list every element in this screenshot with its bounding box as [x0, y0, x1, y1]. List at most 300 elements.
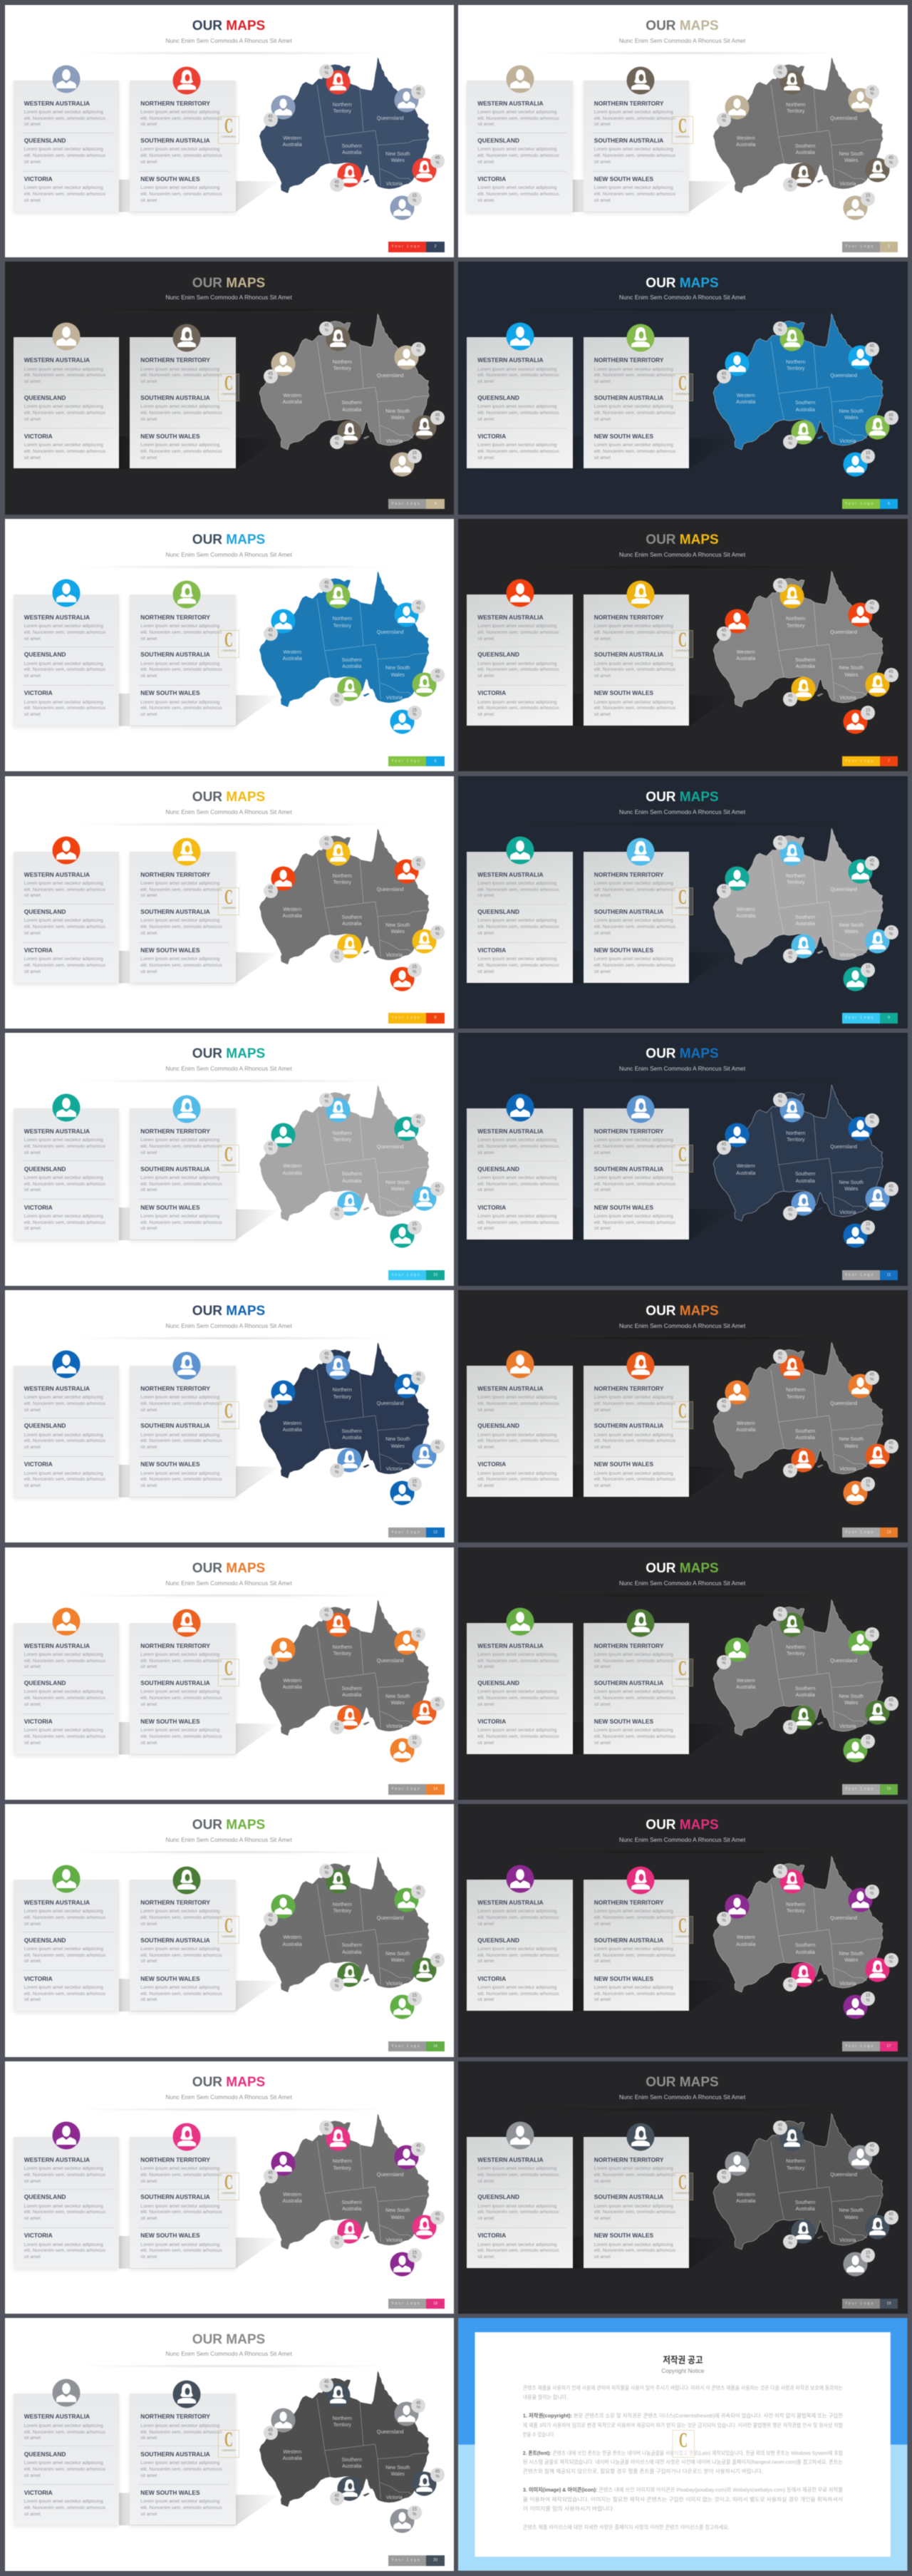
- map labels: Western: [737, 907, 755, 912]
- watermark logo: CONTENTS: [222, 907, 236, 910]
- pin: Southern Australia: %: [335, 1727, 338, 1731]
- item: New South Wales: [594, 1204, 675, 1232]
- map labels: Queensland: [830, 2173, 857, 2178]
- pin: Northern Territory: [773, 1093, 804, 1123]
- card: left: [13, 1622, 119, 1753]
- item: Queensland: Lorem ipsum amet sectetur adipiscing: [24, 1947, 103, 1952]
- pin: Queensland: %: [417, 1892, 420, 1896]
- map labels: Territory: [333, 2166, 351, 2171]
- pin: New South Wales: [412, 1439, 445, 1468]
- item: Queensland: elit. Nuncenim sem, ommodo arhoncus: [477, 1696, 559, 1701]
- item: Queensland: sit amet: [477, 417, 494, 422]
- map labels: Queensland: [377, 887, 404, 892]
- watermark logo: [673, 2428, 694, 2458]
- item: Victoria: Lorem ipsum amet sectetur adipiscing: [24, 1985, 103, 1990]
- map labels: Southern: [795, 915, 815, 920]
- map labels: Queensland: [377, 1659, 404, 1664]
- item: New South Wales: Lorem ipsum amet sectetur adipiscing: [140, 1471, 219, 1476]
- footer logo and page number: [842, 1784, 898, 1795]
- footer logo and page number: Your Logo: [391, 244, 421, 249]
- map labels: Victoria: [386, 2495, 403, 2500]
- item: Southern Australia: [140, 908, 222, 937]
- map labels: [256, 825, 432, 967]
- item: Southern Australia: [594, 908, 675, 937]
- item: New South Wales: elit. Nuncenim sem, ommodo arhoncus: [594, 1477, 675, 1482]
- icon: male avatar: [506, 2121, 534, 2150]
- map labels: Queensland: [377, 1916, 404, 1921]
- map labels: Territory: [333, 109, 351, 114]
- card: left: [13, 1108, 119, 1240]
- item: Southern Australia: [140, 651, 222, 680]
- icon: female avatar: [626, 324, 654, 352]
- item: Victoria: elit. Nuncenim sem, ommodo arhoncus: [24, 1220, 105, 1225]
- notice title: 저작권 공고: [663, 2355, 703, 2366]
- item: Western Australia: Lorem ipsum amet sectetur adipiscing: [477, 1395, 556, 1400]
- map labels: [710, 1340, 885, 1480]
- icon: male avatar: [506, 836, 534, 865]
- map labels: Northern: [786, 1902, 805, 1907]
- pin: Northern Territory: [773, 1864, 804, 1894]
- item: Victoria: elit. Nuncenim sem, ommodo arhoncus: [477, 1992, 559, 1997]
- pin: Queensland: 45: [416, 88, 421, 92]
- pin: Northern Territory: 45: [777, 66, 782, 71]
- item: Southern Australia: Lorem ipsum amet sectetur adipiscing: [594, 1689, 673, 1694]
- item: Southern Australia: sit amet: [594, 674, 611, 679]
- item: Southern Australia: elit. Nuncenim sem, ommodo arhoncus: [140, 924, 222, 929]
- pin: Northern Territory: %: [325, 2385, 328, 2389]
- item: Victoria: elit. Nuncenim sem, ommodo arhoncus: [477, 2248, 559, 2253]
- pin: Northern Territory: 45: [777, 2123, 782, 2128]
- footer logo and page number: [842, 1270, 898, 1280]
- item: Northern Territory: [140, 1642, 222, 1671]
- pin: Southern Australia: [783, 1705, 816, 1734]
- pin: Western Australia: 45: [268, 1657, 273, 1661]
- item: New South Wales: Lorem ipsum amet sectetur adipiscing: [594, 1214, 673, 1219]
- footer logo and page number: Your Logo: [845, 502, 874, 506]
- icon: female avatar: [172, 324, 201, 352]
- pin: Queensland: %: [870, 349, 874, 354]
- pin: Northern Territory: 45: [324, 2380, 329, 2384]
- item: New South Wales: NEW SOUTH WALES: [594, 1975, 653, 1982]
- pin: Southern Australia: %: [789, 699, 792, 704]
- pin: Northern Territory: 45: [777, 324, 782, 328]
- map labels: Territory: [787, 1909, 804, 1914]
- item: Northern Territory: sit amet: [594, 122, 611, 127]
- item: Victoria: elit. Nuncenim sem, ommodo arhoncus: [24, 1477, 105, 1482]
- pin: Southern Australia: [329, 163, 362, 192]
- item: Queensland: sit amet: [24, 1445, 41, 1450]
- item: Northern Territory: elit. Nuncenim sem, ommodo arhoncus: [140, 2430, 222, 2435]
- pin: Western Australia: [717, 609, 750, 641]
- pin: Western Australia: [264, 94, 296, 128]
- item: Western Australia: [24, 356, 105, 384]
- notice intro: [523, 2385, 843, 2401]
- subtitle: Nunc Enim Sem Commodo A Rhoncus Sit Amet: [165, 2093, 292, 2101]
- pin: Victoria: 15: [412, 1222, 417, 1227]
- pin: Southern Australia: 45: [334, 2494, 339, 2498]
- pin: Northern Territory: [319, 578, 351, 609]
- pin: Victoria: 15: [866, 2251, 871, 2255]
- pin: Southern Australia: 45: [788, 180, 793, 185]
- pin: Queensland: %: [870, 2149, 874, 2153]
- map: Australia: [256, 311, 432, 452]
- item: Victoria: sit amet: [477, 198, 494, 203]
- watermark logo: CONTENTS: [222, 393, 236, 396]
- pin: Queensland: 45: [869, 88, 874, 92]
- item: Northern Territory: NORTHERN TERRITORY: [140, 1128, 210, 1135]
- pin: Southern Australia: 45: [334, 952, 339, 956]
- item: Queensland: [477, 1422, 559, 1451]
- item: Victoria: VICTORIA: [477, 947, 506, 954]
- pin: Southern Australia: 45: [788, 437, 793, 441]
- item: Western Australia: WESTERN AUSTRALIA: [477, 356, 544, 364]
- pin: Queensland: 45: [869, 1630, 874, 1634]
- map: Australia: [256, 569, 432, 709]
- item: Southern Australia: SOUTHERN AUSTRALIA: [594, 1937, 663, 1944]
- map labels: Wales: [391, 416, 405, 421]
- pin: Northern Territory: %: [325, 843, 328, 847]
- footer logo and page number: [842, 2299, 898, 2309]
- item: New South Wales: sit amet: [140, 1997, 157, 2002]
- pin: New South Wales: %: [435, 1446, 440, 1451]
- item: Western Australia: [24, 614, 105, 642]
- pin: Western Australia: %: [269, 634, 272, 638]
- icon: female avatar: [626, 1095, 654, 1123]
- card: left: [467, 1622, 573, 1753]
- item: Victoria: VICTORIA: [477, 689, 506, 696]
- icon: female avatar: [172, 66, 201, 96]
- pin: Western Australia: %: [722, 376, 726, 381]
- item: Queensland: QUEENSLAND: [24, 1679, 66, 1686]
- pin: Northern Territory: 45: [777, 1095, 782, 1099]
- pin: Southern Australia: 45: [788, 1208, 793, 1212]
- subtitle: Nunc Enim Sem Commodo A Rhoncus Sit Amet: [619, 808, 745, 815]
- map: Australia: [256, 2369, 432, 2508]
- map labels: Territory: [787, 1652, 804, 1657]
- item: Victoria: sit amet: [24, 969, 41, 974]
- item: Queensland: elit. Nuncenim sem, ommodo arhoncus: [24, 1953, 105, 1958]
- item: Northern Territory: Lorem ipsum amet sectetur adipiscing: [594, 110, 673, 115]
- map labels: Western: [283, 650, 301, 655]
- item: Southern Australia: elit. Nuncenim sem, ommodo arhoncus: [140, 2467, 222, 2472]
- pin: Western Australia: [264, 1123, 296, 1155]
- item: New South Wales: [594, 1460, 675, 1490]
- item: Southern Australia: sit amet: [140, 2216, 157, 2221]
- watermark logo: CONTENTS: [675, 1935, 689, 1938]
- subtitle: Nunc Enim Sem Commodo A Rhoncus Sit Amet: [619, 294, 745, 301]
- pin: Queensland: [848, 1885, 879, 1912]
- pin: Western Australia: %: [269, 119, 272, 123]
- item: Western Australia: sit amet: [477, 893, 494, 898]
- item: Victoria: [477, 1460, 559, 1490]
- panel: slide navy teal: [458, 776, 908, 1029]
- item: Southern Australia: SOUTHERN AUSTRALIA: [140, 1937, 210, 1944]
- map labels: Wales: [391, 929, 405, 934]
- map labels: Victoria: [386, 182, 403, 187]
- map labels: Queensland: [377, 630, 404, 635]
- map labels: Territory: [787, 880, 804, 885]
- pin: Queensland: %: [870, 92, 874, 96]
- pin: Victoria: %: [413, 456, 416, 460]
- map labels: Victoria: [839, 1467, 856, 1472]
- map labels: [710, 825, 885, 967]
- map: Australia: [710, 826, 886, 966]
- card: right: [583, 1108, 689, 1240]
- item: Queensland: elit. Nuncenim sem, ommodo arhoncus: [24, 667, 105, 672]
- map labels: Northern: [786, 874, 805, 879]
- pin: Southern Australia: [782, 163, 816, 192]
- footer logo and page number: 12: [433, 1530, 437, 1535]
- pin: Victoria: [390, 2505, 422, 2533]
- item: Queensland: [24, 2451, 105, 2480]
- pin: New South Wales: 45: [888, 2212, 893, 2217]
- map labels: Australia: [736, 2199, 755, 2204]
- pin: Victoria: %: [866, 199, 870, 203]
- watermark logo: [671, 1401, 693, 1429]
- pin: Western Australia: %: [722, 890, 726, 895]
- icon: male avatar: [52, 322, 81, 351]
- item: Victoria: VICTORIA: [24, 175, 53, 182]
- item: Southern Australia: Lorem ipsum amet sectetur adipiscing: [140, 1433, 219, 1438]
- pin: Southern Australia: [330, 1191, 362, 1220]
- item: Victoria: [477, 175, 559, 203]
- item: Southern Australia: elit. Nuncenim sem, ommodo arhoncus: [140, 1953, 222, 1958]
- map labels: Queensland: [830, 1401, 857, 1406]
- item: Victoria: Lorem ipsum amet sectetur adipiscing: [477, 1985, 556, 1990]
- panel: slide navy dark blue: [458, 1033, 908, 1286]
- map labels: Territory: [787, 2166, 804, 2171]
- watermark logo: [671, 887, 693, 915]
- map labels: Wales: [391, 158, 405, 163]
- item: Victoria: Lorem ipsum amet sectetur adipiscing: [477, 700, 556, 705]
- item: Western Australia: WESTERN AUSTRALIA: [24, 871, 90, 878]
- item: Victoria: VICTORIA: [24, 689, 53, 696]
- item: New South Wales: elit. Nuncenim sem, ommodo arhoncus: [140, 706, 222, 711]
- item: Queensland: elit. Nuncenim sem, ommodo arhoncus: [477, 2210, 559, 2215]
- title: OUR MAPS: [646, 1561, 719, 1576]
- footer logo and page number: 10: [433, 1273, 437, 1277]
- map labels: Wales: [391, 1444, 405, 1449]
- map: Australia: [256, 2111, 432, 2252]
- pin: Queensland: 45: [416, 1630, 421, 1634]
- card: left: [467, 1880, 573, 2011]
- item: New South Wales: NEW SOUTH WALES: [594, 1460, 653, 1468]
- item: Western Australia: sit amet: [24, 379, 41, 384]
- pin: Western Australia: %: [269, 376, 272, 381]
- item: Queensland: sit amet: [24, 417, 41, 422]
- item: Western Australia: [477, 356, 559, 386]
- footer logo and page number: Your Logo: [845, 244, 874, 249]
- item: New South Wales: sit amet: [594, 198, 611, 203]
- item: Southern Australia: [594, 394, 675, 423]
- pin: New South Wales: 45: [435, 2470, 440, 2474]
- item: Northern Territory: Lorem ipsum amet sectetur adipiscing: [594, 1652, 673, 1657]
- item: Southern Australia: sit amet: [140, 1959, 157, 1964]
- pin: Western Australia: 45: [722, 1657, 726, 1661]
- map labels: Western: [737, 393, 755, 398]
- panel: slide blue: [4, 519, 454, 771]
- map labels: Australia: [342, 150, 361, 155]
- map labels: Southern: [795, 2200, 815, 2205]
- item: Southern Australia: SOUTHERN AUSTRALIA: [140, 1165, 210, 1173]
- map labels: Victoria: [386, 1467, 403, 1472]
- panel: slide dark yellow: [458, 519, 908, 771]
- icon: male avatar: [506, 1350, 534, 1379]
- item: Northern Territory: elit. Nuncenim sem, ommodo arhoncus: [140, 1144, 222, 1149]
- item: Queensland: sit amet: [477, 1702, 494, 1707]
- pin: Victoria: [390, 1734, 422, 1762]
- pin: Western Australia: [717, 1894, 750, 1926]
- map labels: Australia: [796, 922, 815, 927]
- pin: Queensland: %: [417, 863, 420, 867]
- item: Victoria: sit amet: [24, 2255, 41, 2260]
- item: Southern Australia: Lorem ipsum amet sectetur adipiscing: [140, 1175, 219, 1180]
- map labels: Australia: [796, 1693, 815, 1698]
- map labels: Territory: [787, 1138, 804, 1143]
- item: Southern Australia: sit amet: [594, 160, 611, 165]
- item: Victoria: VICTORIA: [477, 1460, 506, 1468]
- card: right: [130, 1880, 235, 2011]
- item: Northern Territory: [140, 2156, 222, 2185]
- map labels: Western: [283, 1164, 301, 1169]
- pin: Southern Australia: %: [335, 2498, 338, 2503]
- pin: Western Australia: [264, 351, 296, 383]
- item: Queensland: sit amet: [24, 1187, 41, 1192]
- item: Western Australia: WESTERN AUSTRALIA: [477, 614, 544, 621]
- map labels: Territory: [333, 1652, 351, 1657]
- item: Western Australia: Lorem ipsum amet sectetur adipiscing: [477, 1909, 556, 1914]
- item: Queensland: [477, 394, 559, 423]
- footer logo and page number: 16: [433, 2044, 437, 2049]
- map labels: Southern: [341, 915, 362, 920]
- title: OUR MAPS: [192, 1561, 265, 1576]
- watermark logo: CONTENTS: [675, 2192, 689, 2195]
- map labels: Northern: [333, 2416, 352, 2421]
- pin: Southern Australia: [330, 676, 362, 706]
- pin: Southern Australia: [783, 2219, 816, 2249]
- subtitle: Nunc Enim Sem Commodo A Rhoncus Sit Amet: [165, 1065, 292, 1072]
- pin: New South Wales: [865, 411, 898, 440]
- card: right: [583, 851, 689, 982]
- map labels: Australia: [796, 1950, 815, 1955]
- item: Southern Australia: sit amet: [140, 931, 157, 936]
- footer logo and page number: Your Logo: [391, 1530, 421, 1535]
- item: Northern Territory: NORTHERN TERRITORY: [140, 1899, 210, 1906]
- watermark logo: CONTENTS: [675, 393, 689, 396]
- pin: Queensland: 45: [416, 1887, 421, 1891]
- item: Southern Australia: elit. Nuncenim sem, ommodo arhoncus: [594, 153, 675, 158]
- item: Western Australia: sit amet: [477, 1922, 494, 1927]
- pin: Queensland: %: [870, 1892, 874, 1896]
- pin: Victoria: %: [866, 1227, 870, 1232]
- pin: Northern Territory: 45: [324, 1352, 329, 1356]
- footer logo and page number: [388, 2041, 445, 2051]
- item: Western Australia: elit. Nuncenim sem, ommodo arhoncus: [24, 630, 105, 635]
- panel: slide yellow: [4, 776, 454, 1029]
- item: Southern Australia: sit amet: [594, 1187, 611, 1192]
- pin: New South Wales: [412, 1182, 445, 1211]
- item: Northern Territory: sit amet: [140, 1150, 157, 1155]
- item: New South Wales: Lorem ipsum amet sectetur adipiscing: [140, 957, 219, 962]
- footer logo and page number: [842, 756, 898, 766]
- pin: New South Wales: 45: [435, 1699, 440, 1703]
- item: Western Australia: WESTERN AUSTRALIA: [477, 1128, 544, 1135]
- map labels: Wales: [391, 1958, 405, 1963]
- map labels: Victoria: [839, 439, 856, 444]
- map labels: Australia: [283, 1685, 302, 1690]
- item: Queensland: QUEENSLAND: [24, 1937, 66, 1944]
- item: Queensland: Lorem ipsum amet sectetur adipiscing: [24, 1689, 103, 1694]
- item: Victoria: elit. Nuncenim sem, ommodo arhoncus: [477, 706, 559, 711]
- icon: female avatar: [172, 2123, 201, 2151]
- panel: slide green: [4, 1804, 454, 2057]
- pin: Western Australia: %: [722, 2176, 726, 2180]
- item: Western Australia: sit amet: [24, 1664, 41, 1669]
- pin: Northern Territory: 45: [324, 1866, 329, 1870]
- item: Western Australia: Lorem ipsum amet sectetur adipiscing: [24, 1652, 103, 1657]
- item: Southern Australia: SOUTHERN AUSTRALIA: [140, 137, 210, 144]
- map labels: Northern: [333, 1902, 352, 1907]
- item: Victoria: VICTORIA: [24, 2489, 53, 2496]
- pin: Northern Territory: %: [325, 1871, 328, 1875]
- item: Southern Australia: elit. Nuncenim sem, ommodo arhoncus: [140, 411, 222, 416]
- pin: Southern Australia: %: [335, 1984, 338, 1989]
- card: left: [467, 1108, 573, 1240]
- icon: male avatar: [52, 1350, 81, 1379]
- pin: Southern Australia: 45: [334, 2237, 339, 2241]
- subtitle: Nunc Enim Sem Commodo A Rhoncus Sit Amet: [165, 1322, 292, 1329]
- panel: slide dark blue: [4, 1290, 454, 1542]
- item: New South Wales: NEW SOUTH WALES: [594, 1718, 653, 1725]
- notice intro: 콘텐츠 제품을 사용하기 전에 사용에 관하여 저작물을 사용이 일어 주시기 바랍니다. 따라서 이 콘텐츠 제품을 사용하는 것은 다음 사항과 저작권 보호에 동의하는: [523, 2385, 843, 2391]
- pin: New South Wales: 45: [435, 2212, 440, 2217]
- map labels: Australia: [796, 1179, 815, 1184]
- footer logo and page number: [388, 2555, 445, 2566]
- pin: Northern Territory: %: [325, 329, 328, 333]
- pin: Northern Territory: 45: [777, 1352, 782, 1356]
- pin: Southern Australia: 45: [788, 2237, 793, 2241]
- item: Queensland: sit amet: [24, 2473, 41, 2478]
- pin: Northern Territory: [773, 835, 804, 865]
- item: Northern Territory: sit amet: [140, 1408, 157, 1413]
- icon: female avatar: [172, 1866, 201, 1895]
- item: Southern Australia: Lorem ipsum amet sectetur adipiscing: [594, 1175, 673, 1180]
- map labels: Australia: [283, 400, 302, 405]
- map labels: Wales: [391, 1701, 405, 1706]
- item: Queensland: sit amet: [24, 1702, 41, 1707]
- item: New South Wales: sit amet: [140, 198, 157, 203]
- item: Northern Territory: [594, 100, 675, 127]
- item: New South Wales: [140, 1204, 222, 1232]
- pin: New South Wales: 45: [435, 1185, 440, 1189]
- card: right: [583, 1622, 689, 1753]
- subtitle: Nunc Enim Sem Commodo A Rhoncus Sit Amet: [619, 1322, 745, 1329]
- pin: Victoria: 15: [866, 1736, 871, 1741]
- item: Victoria: VICTORIA: [24, 1975, 53, 1982]
- item: Northern Territory: sit amet: [594, 1408, 611, 1413]
- panel: slide gray: [4, 2318, 454, 2571]
- map labels: Australia: [283, 2199, 302, 2204]
- pin: Queensland: %: [417, 1378, 420, 1382]
- pin: Northern Territory: %: [778, 1100, 782, 1104]
- item: Western Australia: elit. Nuncenim sem, ommodo arhoncus: [24, 1659, 105, 1664]
- item: Northern Territory: [594, 1385, 675, 1413]
- pin: New South Wales: [412, 411, 445, 440]
- map labels: Southern: [341, 144, 362, 149]
- watermark logo: [671, 1145, 693, 1173]
- item: Northern Territory: Lorem ipsum amet sectetur adipiscing: [594, 1395, 673, 1400]
- map labels: Southern: [341, 2200, 362, 2205]
